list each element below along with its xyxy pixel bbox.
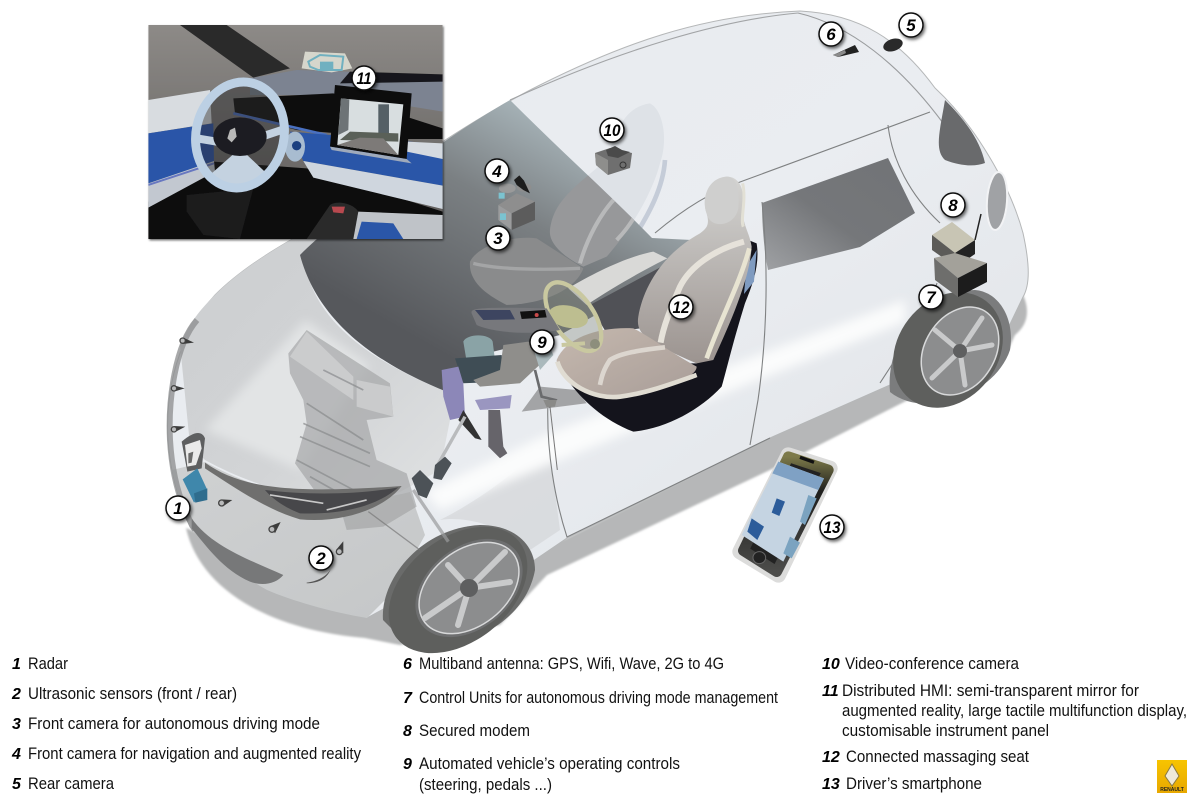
- legend column 1: [11, 654, 361, 793]
- legend column 2: Control Units for autonomous driving mode management: [419, 688, 778, 707]
- sensors: [171, 337, 343, 555]
- tablet: [330, 85, 412, 163]
- badge 1: 1: [173, 499, 183, 518]
- door panel: [148, 90, 212, 133]
- ground shadow: [186, 295, 1027, 645]
- badge 2: 2: [315, 549, 326, 568]
- steering wheel: [534, 273, 612, 360]
- windshield dark area: [300, 100, 692, 395]
- badge 6: [819, 22, 843, 46]
- legend column 3: Distributed HMI: semi-transparent mirror for: [842, 681, 1139, 700]
- badge 13: [820, 515, 844, 539]
- icon: rear camera 5: [882, 36, 904, 54]
- legend column 2: Secured modem: [419, 721, 530, 740]
- steering wheel: [191, 78, 289, 192]
- badge 7: [919, 285, 943, 309]
- side vent: [307, 569, 331, 583]
- badge 4: [485, 159, 509, 183]
- legend column 3: 11: [822, 683, 839, 700]
- icon: radar unit: [183, 468, 207, 503]
- hood: [180, 212, 455, 499]
- legend column 2: 8: [403, 723, 412, 740]
- legend column 1: Rear camera: [28, 774, 114, 793]
- badge 3: [486, 226, 510, 250]
- legend column 1: Front camera for autonomous driving mode: [28, 714, 320, 733]
- side panel shading: [440, 440, 560, 550]
- car body: [168, 11, 1028, 618]
- column lower joint: [412, 457, 452, 498]
- badge 9: 9: [537, 333, 547, 352]
- badge 12: [669, 295, 693, 319]
- legend column 3: 13: [822, 776, 840, 793]
- Renault logo: RENAULT: [1160, 787, 1184, 793]
- roof and door lines: [510, 13, 943, 537]
- badge 9: [530, 330, 554, 354]
- car illustration: [168, 11, 1028, 679]
- hood cut lines: [368, 512, 420, 550]
- icon: modem 8: [932, 214, 981, 267]
- legend column 3: Video-conference camera: [845, 654, 1019, 673]
- front end details: [171, 337, 448, 584]
- Renault logo: [1157, 760, 1187, 793]
- badge 8: [941, 193, 965, 217]
- inset: dashboard view: [148, 25, 443, 239]
- icon: antenna 6: [833, 45, 859, 57]
- legend column 2: Multiband antenna: GPS, Wifi, Wave, 2G to 4G: [419, 654, 724, 673]
- front wheel: [365, 501, 551, 679]
- legend column 2: 9: [403, 756, 412, 773]
- lower cabin: [148, 162, 443, 239]
- dash arm: [590, 267, 662, 333]
- badge 10: 10: [604, 121, 621, 140]
- rear seat upper: [550, 103, 665, 267]
- engine ghost: [288, 330, 417, 530]
- icon: control units 7: [934, 253, 987, 297]
- legend column 3: [822, 654, 1187, 793]
- rim of front end: [170, 320, 197, 530]
- pedal box and steering column: [437, 335, 557, 470]
- bumper: [172, 462, 425, 618]
- rear seat lower: [470, 176, 634, 305]
- legend column 1: 3: [12, 716, 21, 733]
- seat back: [638, 177, 752, 363]
- badge 11: [352, 66, 376, 90]
- legend column 3: 12: [822, 749, 840, 766]
- door highlights: [425, 300, 905, 510]
- smartphone: [740, 455, 830, 575]
- legend column 2: [403, 654, 778, 794]
- rear light: [985, 171, 1009, 231]
- legend column 3: customisable instrument panel: [842, 721, 1049, 740]
- hood highlight: [205, 320, 370, 470]
- badge 13: 13: [824, 518, 841, 537]
- legend column 1: 4: [11, 746, 21, 763]
- dash top: [250, 70, 443, 112]
- badge 4: 4: [491, 162, 502, 181]
- legend column 1: 1: [12, 656, 21, 673]
- badge 5: [899, 13, 923, 37]
- headlight: [205, 463, 402, 520]
- seat base: [558, 237, 758, 432]
- legend column 3: Connected massaging seat: [846, 747, 1029, 766]
- vent: [285, 132, 305, 162]
- legend column 3: 10: [822, 656, 840, 673]
- badge 1: [166, 496, 190, 520]
- rear wheel: [870, 270, 1026, 430]
- console: [307, 203, 358, 239]
- badge 6: 6: [826, 25, 836, 44]
- legend column 1: Ultrasonic sensors (front / rear): [28, 684, 237, 703]
- front seat and controls: [412, 177, 758, 498]
- legend column 2: Automated vehicle’s operating controls: [419, 754, 680, 773]
- badge 2: [309, 546, 333, 570]
- legend column 2: 6: [403, 656, 412, 673]
- lower grille: [192, 518, 283, 584]
- badge 3: 3: [493, 229, 503, 248]
- legend column 3: Driver’s smartphone: [846, 774, 982, 793]
- icon: front cameras 3 and 4: [498, 175, 535, 230]
- badge 8: 8: [948, 196, 958, 215]
- renault badge: [182, 433, 205, 472]
- legend column 2: 7: [403, 690, 413, 707]
- badge 10: [600, 118, 624, 142]
- pillar: [180, 25, 290, 78]
- head-up display: [302, 52, 352, 72]
- centre console: [471, 308, 560, 333]
- rear tail: [939, 100, 985, 165]
- legend column 1: Radar: [28, 654, 68, 673]
- legend column 1: 2: [11, 686, 21, 703]
- icon: video camera 10: [595, 146, 632, 175]
- rear window: [762, 158, 915, 270]
- badge 5: 5: [906, 16, 916, 35]
- badge 12: 12: [672, 298, 690, 317]
- footwell shadow: [522, 387, 587, 412]
- number badges: [166, 13, 965, 570]
- seat cushion: [557, 328, 697, 399]
- legend column 2: (steering, pedals ...): [419, 775, 552, 794]
- badge 11: 11: [356, 69, 372, 88]
- badge 7: 7: [926, 288, 937, 307]
- blue strip: [290, 132, 443, 186]
- legend column 1: Front camera for navigation and augmented reality: [28, 744, 361, 763]
- legend column 1: 5: [12, 776, 22, 793]
